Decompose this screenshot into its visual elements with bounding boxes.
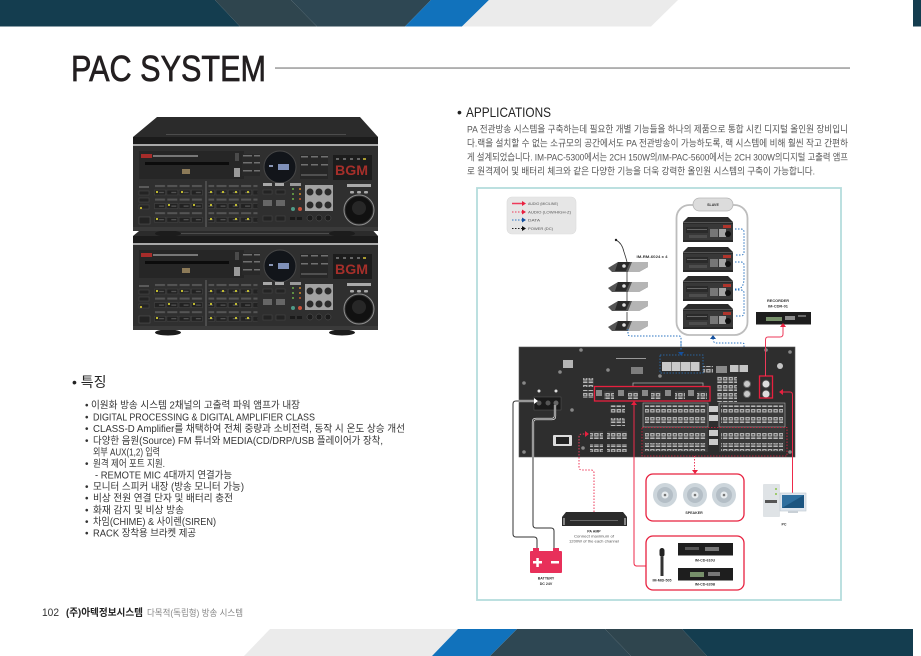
rear panel [519, 347, 795, 457]
applications paragraph: PA 전관방송 시스템을 구축하는데 필요한 개별 기능들을 하나의 제품으로 통합 시킨 디지털 올인원 장비입니 [467, 124, 848, 136]
slave label [693, 198, 733, 211]
legend: AUDIO (MIC/LINE) [528, 201, 559, 206]
slave amplifier 4 [683, 304, 733, 329]
highlight: red speaker outputs [642, 428, 787, 456]
company name: (주)아텍정보시스템 [66, 607, 143, 619]
PA amp [562, 512, 627, 526]
battery [530, 548, 562, 573]
red link: line input to mic box [631, 401, 646, 566]
speaker group: SPEAKER [685, 511, 703, 515]
features list: • [85, 506, 89, 516]
power cable 2 [533, 405, 555, 552]
slave amplifier 3 [683, 276, 733, 301]
recorder [756, 299, 811, 324]
features list: • [85, 459, 89, 470]
features list: 화재 감지 및 비상 방송 [93, 504, 184, 516]
features list: DIGITAL PROCESSING & DIGITAL AMPLIFIER CLASS [93, 412, 315, 424]
features list: 모니터 스피커 내장 (방송 모니터 가능) [93, 481, 244, 493]
features list: 차임(CHIME) & 사이렌(SIREN) [93, 515, 216, 528]
features list: • [85, 482, 89, 493]
display text: upper BGM: BGM [335, 162, 368, 178]
remote mic stations [608, 239, 648, 331]
remote mic label: IM-RM-6024 x 4 [636, 255, 668, 259]
legend: DATA [528, 218, 540, 222]
dotted link: PA amp [579, 431, 594, 512]
battery label: DC 24V [540, 582, 553, 586]
features list [85, 398, 405, 540]
rear panel line inputs [596, 390, 707, 399]
highlight: red audio connectors [760, 376, 772, 398]
recorder: RECORDER [767, 299, 789, 303]
media source group [646, 536, 744, 590]
title rule [275, 67, 850, 69]
display text: lower BGM: BGM [335, 261, 368, 277]
media source group: IM-CD-620B [695, 582, 715, 586]
features list: CLASS-D Amplifier를 채택하여 전체 중량과 소비전력, 동작 시 온도 상승 개선 [93, 422, 405, 435]
features list: • [85, 517, 89, 528]
features list: 이원화 방송 시스템 2채널의 고출력 파워 앰프가 내장 [91, 398, 300, 412]
footer band [244, 629, 913, 656]
page number: 102 [42, 607, 59, 619]
power cable 1 [513, 398, 538, 552]
legend [507, 197, 576, 234]
data link to slave [710, 335, 744, 347]
features list: • [85, 424, 89, 435]
battery label: BATTERY [538, 576, 555, 580]
PA amp label: Connect maximum of [574, 534, 614, 538]
applications heading: • [457, 104, 462, 120]
data link from stations to rear panel [628, 329, 681, 347]
data links between slaves [735, 229, 744, 316]
dotted link: speakers [692, 456, 698, 474]
PA amp label: 1200W of the each channel [569, 540, 619, 544]
PC [763, 484, 806, 526]
highlight: red mic line inputs [594, 386, 710, 401]
speaker group [646, 474, 744, 521]
features list: • [85, 494, 89, 504]
applications paragraph: 게 설계되었습니다. IM-PAC-5300에서는 2CH 150W의/IM-PAC-5600에서는 2CH 300W의디지털 고출력 앰프 [467, 152, 848, 164]
features list: • [85, 528, 89, 540]
features list: 외부 AUX(1,2) 입력 [93, 446, 160, 458]
features list: - REMOTE MIC 4대까지 연결가능 [95, 470, 232, 482]
slave label: SLAVE [707, 203, 719, 207]
applications paragraph: 로 원격제어 및 배터리 체크와 같은 다양한 기능을 더욱 강력한 올인원 시스템의 구축이 가능합니다. [467, 166, 815, 178]
features list: • [85, 412, 89, 424]
features list: 원격 제어 포트 지원. [93, 457, 165, 470]
applications paragraph: 다.랙을 설치할 수 없는 소규모의 공간에서도 PA 전관방송이 가능하도록, 랙 시스템에 비해 훨씬 작고 간편하 [467, 138, 848, 150]
media source group: IM-MID-505 [653, 578, 671, 582]
highlight: rear panel data ports [660, 342, 703, 373]
diagram frame [477, 188, 841, 600]
recorder: IM-CDR-01 [768, 304, 788, 308]
slave amplifier 2 [683, 247, 733, 272]
features list: 비상 전원 연결 단자 및 배터리 충전 [93, 492, 233, 504]
features heading: • 특징 [72, 374, 107, 390]
legend: POWER (DC) [528, 226, 554, 231]
PC: PC [782, 522, 787, 526]
media source group: IM-CD-610U [695, 558, 715, 562]
features list: 다양한 음원(Source) FM 튜너와 MEDIA(CD/DRP/USB 플레이어가 장착, [93, 435, 383, 447]
product photo: upper amplifier [133, 117, 378, 236]
applications paragraph [467, 124, 848, 178]
features list: • [85, 400, 89, 412]
slave amplifier 1 [683, 217, 733, 242]
features list: RACK 장착용 브라켓 제공 [93, 528, 196, 540]
battery label [538, 576, 555, 586]
title: PAC SYSTEM [71, 48, 266, 89]
red link: PC audio [779, 389, 792, 493]
features list: • [85, 436, 89, 447]
legend: AUDIO (LOW/HIGH-Z) [528, 210, 572, 214]
applications heading: APPLICATIONS [466, 104, 551, 120]
PA amp label [569, 530, 619, 544]
header band [0, 0, 921, 26]
chapter name: 다목적(독립형) 방송 시스템 [147, 607, 243, 618]
product photo: lower amplifier [133, 216, 378, 336]
slave group box [676, 205, 748, 335]
recorder link [766, 323, 786, 376]
PA amp label: PA AMP [587, 530, 601, 534]
